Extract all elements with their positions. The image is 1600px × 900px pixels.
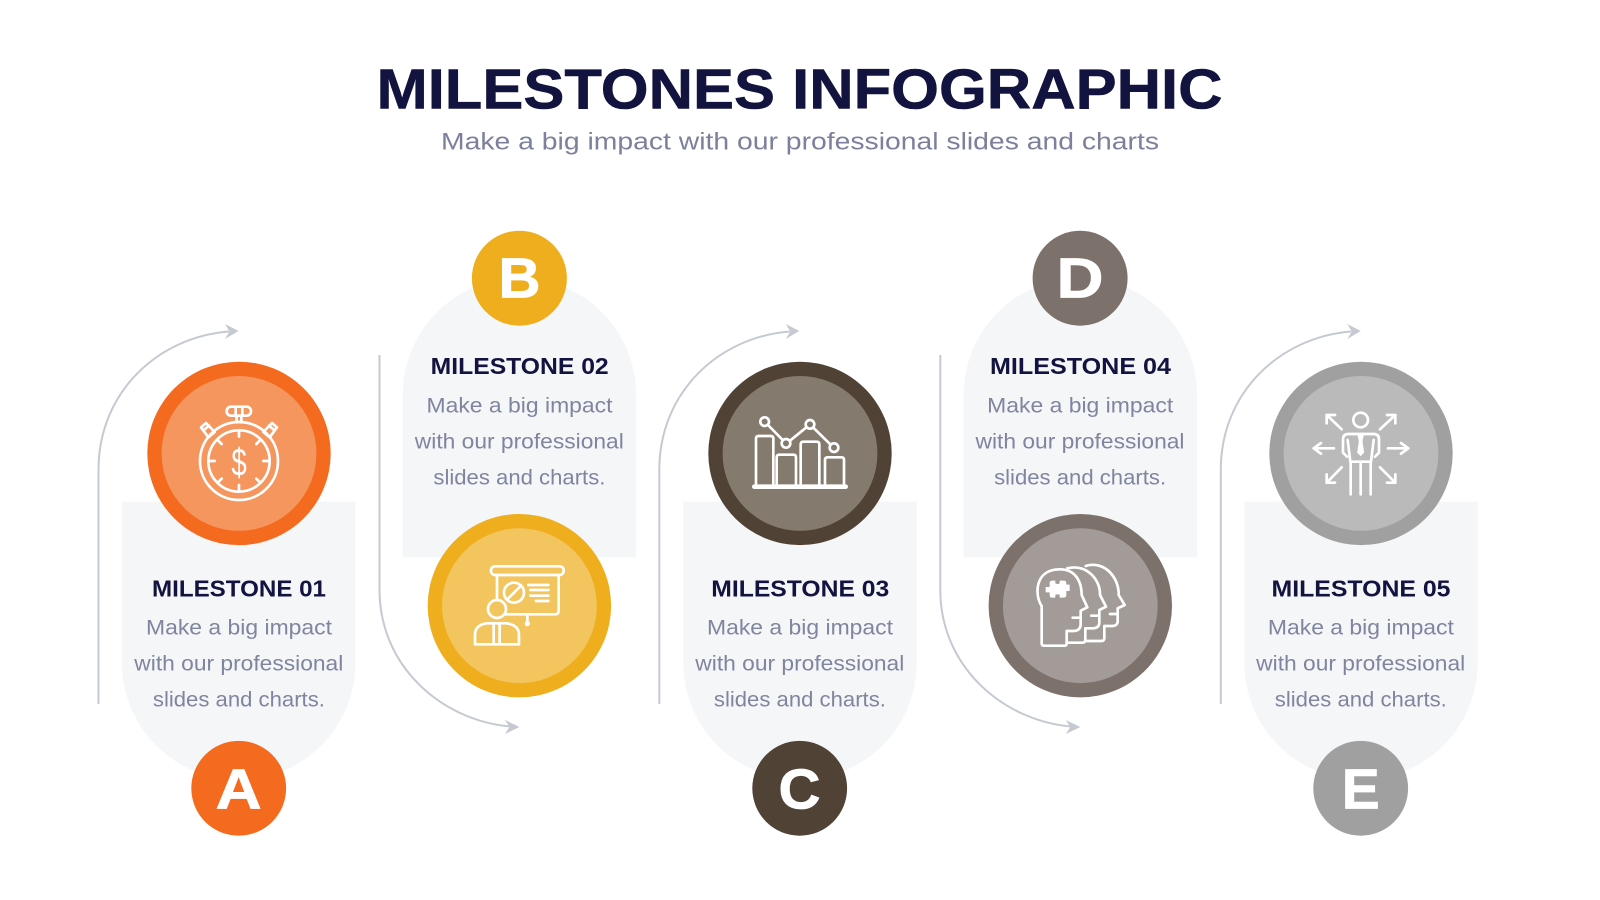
description: with our professional <box>974 429 1184 453</box>
panel: milestone 01 <box>122 362 355 836</box>
inner circle <box>442 528 597 683</box>
card background <box>403 278 636 557</box>
outer circle <box>989 514 1172 697</box>
inner circle <box>1284 376 1438 531</box>
description: slides and charts. <box>153 688 325 712</box>
subtitle: Make a big impact with our professional slides and charts <box>441 128 1159 156</box>
heading: MILESTONE 05 <box>1272 576 1450 602</box>
title: MILESTONES INFOGRAPHIC <box>376 57 1222 121</box>
letter badge D: D <box>1056 247 1104 311</box>
arrow: to milestone 02 <box>380 355 520 734</box>
outer circle <box>1269 362 1453 545</box>
outer circle <box>147 362 331 545</box>
description <box>1255 616 1465 712</box>
description: with our professional <box>414 429 624 453</box>
icon: stopwatch with dollar sign: $ <box>231 440 247 484</box>
letter badge B <box>472 231 567 326</box>
outer circle <box>428 514 611 697</box>
description <box>414 393 624 489</box>
icon: presenter with board <box>475 566 564 644</box>
description: Make a big impact <box>426 393 613 417</box>
card background <box>964 278 1197 557</box>
panel: milestone 05 <box>1244 362 1478 836</box>
description: slides and charts. <box>1275 688 1447 712</box>
letter badge E: E <box>1342 757 1380 821</box>
inner circle <box>162 376 316 531</box>
arrow: to milestone 03 <box>659 324 799 704</box>
heading: MILESTONE 01 <box>152 576 326 602</box>
description: with our professional <box>133 652 343 676</box>
description: with our professional <box>1255 652 1465 676</box>
heading: MILESTONE 02 <box>431 353 609 379</box>
description <box>133 616 343 712</box>
letter badge E <box>1313 741 1408 836</box>
arrow: to milestone 01 <box>98 324 238 704</box>
inner circle <box>723 376 877 531</box>
heading: MILESTONE 03 <box>711 576 889 602</box>
description <box>694 616 904 712</box>
description: Make a big impact <box>987 393 1173 417</box>
description: slides and charts. <box>994 465 1166 489</box>
description: Make a big impact <box>1268 616 1454 640</box>
heading: MILESTONE 04 <box>990 353 1171 379</box>
letter badge D <box>1033 231 1128 326</box>
panel: milestone 02 <box>403 231 636 697</box>
arrow: to milestone 04 <box>940 355 1080 734</box>
panel: milestone 03 <box>683 362 917 836</box>
letter badge C: C <box>778 757 820 821</box>
arrow: to milestone 05 <box>1221 324 1361 704</box>
panel: milestone 04 <box>964 231 1197 697</box>
card background <box>683 502 917 780</box>
icon: heads with puzzle piece <box>1037 565 1125 646</box>
icon: bar and line chart <box>754 417 846 487</box>
description: slides and charts. <box>714 688 886 712</box>
outer circle <box>708 362 892 545</box>
card background <box>1244 502 1478 780</box>
description: Make a big impact <box>707 616 893 640</box>
card background <box>122 502 355 780</box>
icon: stopwatch with dollar sign <box>200 407 278 500</box>
inner circle <box>1003 528 1158 683</box>
description <box>974 393 1184 489</box>
icon: person with arrows in six directions <box>1314 413 1408 494</box>
letter badge B: B <box>498 247 540 311</box>
description: slides and charts. <box>433 465 605 489</box>
description: with our professional <box>694 652 904 676</box>
letter badge A: A <box>216 757 262 821</box>
description: Make a big impact <box>146 616 332 640</box>
letter badge C <box>752 741 847 836</box>
letter badge A <box>191 741 286 836</box>
